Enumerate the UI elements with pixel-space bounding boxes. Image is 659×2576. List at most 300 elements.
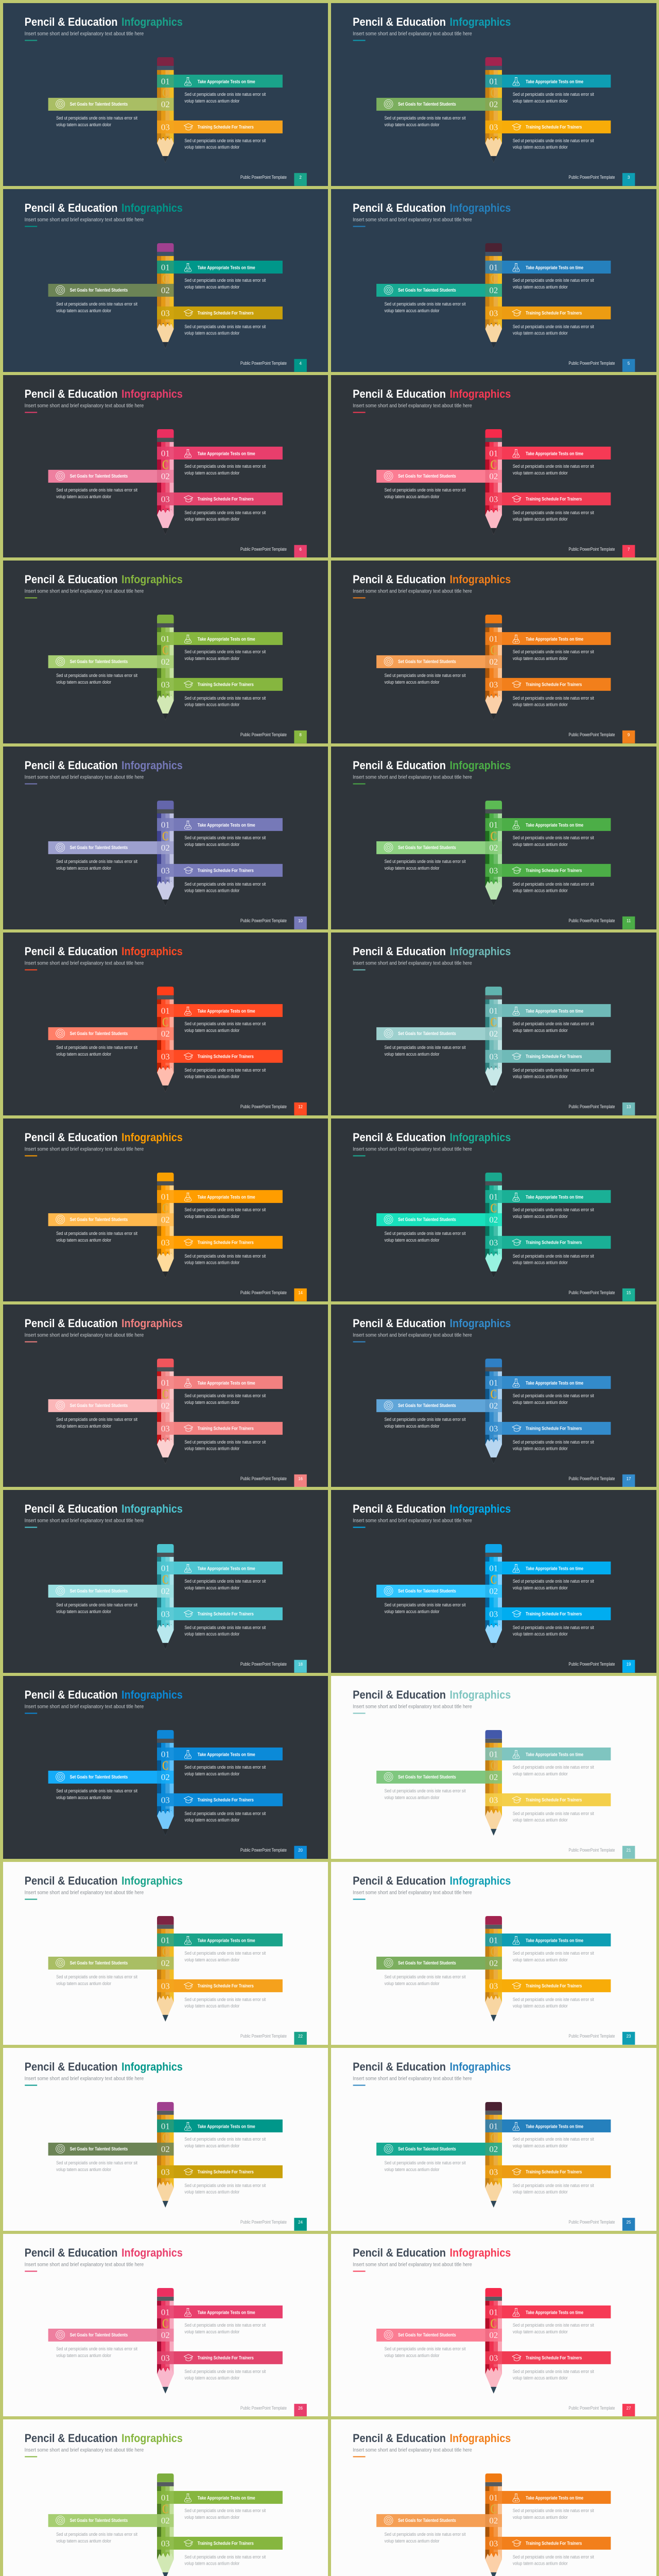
icon: pencil [485, 57, 502, 163]
footer: Public PowerPoint Template [568, 361, 615, 366]
bar 03: Training Schedule For Trainers [526, 2170, 582, 2175]
footer: Public PowerPoint Template [240, 547, 287, 552]
title: Infographics [122, 945, 183, 958]
text 03: volup tatem accus antium dolor [184, 888, 239, 893]
bar 03: 03 [161, 1238, 170, 1247]
text 03: volup tatem accus antium dolor [513, 1817, 568, 1823]
text 01 [184, 1393, 266, 1405]
subtitle: Insert some short and brief explanatory text about title here [25, 2076, 144, 2081]
bar 01 [485, 2120, 611, 2132]
watermark: C [162, 2502, 169, 2516]
text 01: volup tatem accus antium dolor [513, 1585, 568, 1590]
bar 03 [485, 1793, 611, 1806]
page number: 20 [298, 1848, 303, 1853]
text 01 [513, 1393, 594, 1405]
title [25, 573, 183, 586]
bar 03 [157, 492, 283, 505]
page number: 5 [628, 361, 630, 366]
panel: slide 7 [331, 375, 656, 557]
text 01: Sed ut perspiciatis unde onis iste natus error sit [184, 277, 266, 283]
text 01: Sed ut perspiciatis unde onis iste natus error sit [184, 1764, 266, 1770]
page number: 21 [627, 1848, 631, 1853]
footer: Public PowerPoint Template [240, 2219, 287, 2225]
bar 02: 02 [161, 1958, 170, 1968]
subtitle: Insert some short and brief explanatory text about title here [353, 1332, 472, 1338]
bar 03 [485, 864, 611, 877]
text 03 [513, 2182, 594, 2194]
title: Infographics [122, 1131, 183, 1144]
bar 01 [485, 447, 611, 459]
bar 01: 01 [161, 634, 170, 644]
text 03: Sed ut perspiciatis unde onis iste natus error sit [513, 1810, 594, 1816]
text 03 [184, 2368, 266, 2380]
panel: slide 21 [331, 1676, 656, 1859]
bar 03 [485, 2351, 611, 2364]
text 01: volup tatem accus antium dolor [184, 841, 239, 847]
icon: pencil [157, 2473, 174, 2576]
text 01 [184, 2508, 266, 2520]
text 01 [184, 649, 266, 661]
accent rule [353, 226, 366, 227]
title: Infographics [450, 2432, 511, 2445]
bar 03: 03 [489, 2167, 498, 2177]
bar 03: Training Schedule For Trainers [526, 311, 582, 316]
icon: pencil [157, 2288, 174, 2393]
bar 01: 01 [489, 1378, 498, 1387]
page number [622, 545, 635, 557]
icon: pencil [157, 987, 174, 1092]
title: Pencil & Education [25, 1131, 117, 1144]
accent rule [25, 1341, 37, 1342]
title: Pencil & Education [25, 202, 117, 214]
text 03: volup tatem accus antium dolor [513, 1260, 568, 1265]
icon: pencil [485, 429, 502, 534]
text 03: Sed ut perspiciatis unde onis iste natus error sit [184, 1253, 266, 1259]
title [25, 2247, 183, 2259]
text 02 [56, 487, 138, 499]
accent rule [353, 1713, 366, 1714]
text 01: volup tatem accus antium dolor [513, 98, 568, 104]
text 02: Sed ut perspiciatis unde onis iste natus error sit [56, 1044, 138, 1050]
text 02 [385, 115, 466, 127]
text 02: volup tatem accus antium dolor [385, 1609, 440, 1614]
icon: pencil [485, 2473, 502, 2576]
bar 02: Set Goals for Talented Students [70, 1774, 128, 1780]
text 03 [184, 2182, 266, 2194]
subtitle: Insert some short and brief explanatory text about title here [353, 2447, 472, 2453]
bar 01: Take Appropriate Tests on time [198, 451, 255, 456]
text 02 [385, 1044, 466, 1057]
text 02: volup tatem accus antium dolor [385, 494, 440, 499]
bar 01 [157, 1934, 283, 1946]
bar 01 [485, 2491, 611, 2504]
watermark: C [490, 829, 497, 843]
bar 03: 03 [489, 680, 498, 690]
bar 03: 03 [489, 122, 498, 132]
icon: pencil [485, 2102, 502, 2208]
icon: pencil [157, 1730, 174, 1836]
bar 03: Training Schedule For Trainers [198, 2541, 254, 2546]
subtitle: Insert some short and brief explanatory text about title here [25, 774, 144, 781]
text 03: Sed ut perspiciatis unde onis iste natus error sit [513, 2554, 594, 2560]
bar 02: Set Goals for Talented Students [70, 1031, 128, 1036]
text 03 [184, 696, 266, 707]
page number: 11 [627, 919, 631, 923]
bar 01: 01 [489, 1750, 498, 1759]
text 02 [56, 2346, 138, 2358]
bar 01: Take Appropriate Tests on time [526, 1566, 583, 1571]
text 03: volup tatem accus antium dolor [184, 1260, 239, 1265]
title: Pencil & Education [353, 202, 446, 214]
bar 02: Set Goals for Talented Students [70, 101, 128, 107]
bar 03 [485, 1421, 611, 1434]
text 01 [513, 649, 594, 661]
text 01: Sed ut perspiciatis unde onis iste natus error sit [513, 463, 594, 469]
accent rule [25, 1713, 37, 1714]
page number: 10 [298, 919, 303, 923]
footer: Public PowerPoint Template [568, 1848, 615, 1853]
text 01: volup tatem accus antium dolor [184, 470, 239, 476]
text 01: Sed ut perspiciatis unde onis iste natus error sit [513, 2322, 594, 2328]
text 01: Sed ut perspiciatis unde onis iste natus error sit [513, 1579, 594, 1584]
text 01 [513, 1579, 594, 1590]
bar 01: 01 [489, 1192, 498, 1201]
title [353, 573, 511, 586]
panel: slide 28 [3, 2419, 328, 2576]
bar 02 [48, 1399, 174, 1412]
text 01: volup tatem accus antium dolor [513, 1957, 568, 1962]
title [353, 1875, 511, 1887]
page number [622, 917, 635, 929]
text 03: Sed ut perspiciatis unde onis iste natus error sit [184, 2182, 266, 2188]
panel: slide 22 [3, 1862, 328, 2045]
text 02: volup tatem accus antium dolor [56, 2166, 111, 2172]
title: Pencil & Education [25, 1875, 117, 1887]
watermark: C [162, 643, 169, 657]
text 03: volup tatem accus antium dolor [184, 2003, 239, 2008]
text 03: Sed ut perspiciatis unde onis iste natus error sit [184, 1439, 266, 1445]
title [25, 388, 183, 400]
text 02 [56, 1230, 138, 1243]
bar 02: 02 [161, 2516, 170, 2526]
page number [622, 1846, 635, 1859]
text 02: volup tatem accus antium dolor [385, 2352, 440, 2358]
text 02 [385, 673, 466, 685]
text 02: volup tatem accus antium dolor [56, 1051, 111, 1057]
text 03 [184, 324, 266, 335]
bar 03: Training Schedule For Trainers [526, 682, 582, 687]
accent rule [25, 2084, 37, 2086]
footer: Public PowerPoint Template [568, 1290, 615, 1295]
text 03: Sed ut perspiciatis unde onis iste natus error sit [513, 1996, 594, 2002]
bar 02 [48, 1771, 174, 1784]
bar 02: Set Goals for Talented Students [70, 1403, 128, 1408]
text 03: Sed ut perspiciatis unde onis iste natus error sit [184, 1810, 266, 1816]
text 02: Sed ut perspiciatis unde onis iste natus error sit [385, 2532, 466, 2537]
bar 01: Take Appropriate Tests on time [198, 822, 255, 828]
watermark: C [490, 1387, 497, 1401]
text 02 [56, 1044, 138, 1057]
watermark: C [490, 1758, 497, 1773]
bar 02: 02 [489, 1215, 498, 1225]
text 02: Sed ut perspiciatis unde onis iste natus error sit [56, 673, 138, 678]
text 02: volup tatem accus antium dolor [385, 1980, 440, 1986]
title: Infographics [450, 202, 511, 214]
bar 03: 03 [161, 866, 170, 875]
text 01 [184, 1021, 266, 1033]
title: Pencil & Education [25, 945, 117, 958]
title: Infographics [122, 16, 183, 28]
bar 02: Set Goals for Talented Students [398, 845, 456, 850]
bar 03: 03 [161, 1981, 170, 1991]
text 03 [513, 881, 594, 893]
text 02 [56, 2160, 138, 2172]
bar 02 [48, 98, 174, 111]
text 01: volup tatem accus antium dolor [513, 2329, 568, 2334]
bar 02: 02 [161, 657, 170, 667]
icon: pencil [157, 1916, 174, 2022]
text 02: Sed ut perspiciatis unde onis iste natus error sit [385, 1044, 466, 1050]
bar 02: 02 [489, 1029, 498, 1039]
subtitle: Insert some short and brief explanatory text about title here [353, 403, 472, 409]
footer: Public PowerPoint Template [568, 1104, 615, 1109]
bar 01: 01 [161, 2121, 170, 2131]
watermark: C [162, 2130, 169, 2144]
icon: pencil [157, 615, 174, 720]
bar 02: Set Goals for Talented Students [70, 1589, 128, 1594]
panel: slide 29 [331, 2419, 656, 2576]
title [353, 1689, 511, 1701]
title: Pencil & Education [25, 388, 117, 400]
title: Infographics [122, 1875, 183, 1887]
subtitle: Insert some short and brief explanatory text about title here [353, 588, 472, 595]
text 03: Sed ut perspiciatis unde onis iste natus error sit [184, 2368, 266, 2374]
title: Pencil & Education [353, 1317, 446, 1330]
bar 03: 03 [489, 1423, 498, 1433]
footer: Public PowerPoint Template [240, 361, 287, 366]
bar 03 [157, 1236, 283, 1249]
title: Infographics [122, 2061, 183, 2073]
title: Pencil & Education [353, 574, 446, 586]
bar 01 [485, 261, 611, 274]
panel: slide 10 [3, 747, 328, 929]
text 03 [184, 2554, 266, 2566]
bar 02: 02 [161, 2144, 170, 2154]
bar 01 [485, 1376, 611, 1388]
bar 01 [485, 632, 611, 645]
footer: Public PowerPoint Template [240, 1104, 287, 1109]
icon: pencil [157, 1544, 174, 1650]
title [25, 1875, 183, 1887]
bar 03: 03 [161, 680, 170, 690]
bar 03 [485, 2537, 611, 2550]
bar 03: 03 [489, 866, 498, 875]
title: Pencil & Education [353, 2432, 446, 2445]
bar 01: Take Appropriate Tests on time [198, 2310, 255, 2315]
text 02: volup tatem accus antium dolor [56, 1794, 111, 1800]
text 01: Sed ut perspiciatis unde onis iste natus error sit [184, 2136, 266, 2142]
text 01: Sed ut perspiciatis unde onis iste natus error sit [513, 2508, 594, 2513]
text 02 [385, 1602, 466, 1614]
text 02: volup tatem accus antium dolor [385, 1051, 440, 1057]
bar 02: 02 [489, 843, 498, 853]
text 01: volup tatem accus antium dolor [184, 1957, 239, 1962]
bar 01: Take Appropriate Tests on time [198, 636, 255, 642]
title: Infographics [122, 388, 183, 400]
panel: slide 19 [331, 1490, 656, 1673]
accent rule [25, 1155, 37, 1156]
bar 01 [485, 1004, 611, 1017]
bar 03 [485, 678, 611, 691]
panel: slide 20 [3, 1676, 328, 1859]
text 01: volup tatem accus antium dolor [184, 1399, 239, 1405]
bar 03 [157, 2537, 283, 2550]
bar 01: 01 [489, 448, 498, 458]
text 03 [513, 1067, 594, 1079]
bar 01: Take Appropriate Tests on time [526, 2495, 583, 2501]
bar 03: Training Schedule For Trainers [198, 868, 254, 873]
bar 03 [485, 1236, 611, 1249]
text 01 [513, 1950, 594, 1962]
text 02: Sed ut perspiciatis unde onis iste natus error sit [385, 1602, 466, 1607]
bar 03: Training Schedule For Trainers [526, 2541, 582, 2546]
page number [294, 2403, 307, 2416]
bar 03: Training Schedule For Trainers [198, 1054, 254, 1059]
text 01: Sed ut perspiciatis unde onis iste natus error sit [184, 1950, 266, 1956]
bar 02: Set Goals for Talented Students [70, 2518, 128, 2523]
bar 03: 03 [489, 1981, 498, 1991]
text 03 [184, 1253, 266, 1265]
bar 02: Set Goals for Talented Students [70, 2146, 128, 2151]
bar 01 [157, 447, 283, 459]
watermark: C [490, 457, 497, 471]
text 03: Sed ut perspiciatis unde onis iste natus error sit [184, 324, 266, 329]
bar 03: 03 [161, 2167, 170, 2177]
bar 02 [48, 2143, 174, 2156]
bar 03: Training Schedule For Trainers [198, 682, 254, 687]
bar 02: Set Goals for Talented Students [70, 473, 128, 479]
bar 01 [157, 2120, 283, 2132]
text 03: Sed ut perspiciatis unde onis iste natus error sit [513, 2182, 594, 2188]
title [353, 16, 511, 28]
title: Infographics [450, 573, 511, 586]
bar 03: Training Schedule For Trainers [198, 2170, 254, 2175]
text 03 [184, 881, 266, 893]
text 02: Sed ut perspiciatis unde onis iste natus error sit [56, 301, 138, 307]
watermark: C [490, 1944, 497, 1959]
text 01 [513, 91, 594, 104]
page number: 14 [298, 1291, 303, 1295]
panel: slide 24 [3, 2048, 328, 2231]
text 02 [56, 858, 138, 871]
text 01: volup tatem accus antium dolor [184, 2515, 239, 2520]
text 03 [513, 1439, 594, 1451]
text 01: volup tatem accus antium dolor [184, 1585, 239, 1590]
bar 03 [157, 2165, 283, 2178]
title [353, 2247, 511, 2259]
text 01: volup tatem accus antium dolor [513, 841, 568, 847]
text 02: Sed ut perspiciatis unde onis iste natus error sit [385, 1788, 466, 1793]
panel: slide 3 [331, 3, 656, 186]
page number: 2 [299, 175, 302, 180]
text 03: Sed ut perspiciatis unde onis iste natus error sit [513, 138, 594, 143]
icon: pencil [485, 2288, 502, 2393]
bar 03: Training Schedule For Trainers [198, 311, 254, 316]
bar 01 [485, 1934, 611, 1946]
bar 03 [157, 1607, 283, 1620]
text 03: volup tatem accus antium dolor [184, 1445, 239, 1451]
bar 02: Set Goals for Talented Students [398, 101, 456, 107]
accent rule [25, 412, 37, 413]
bar 01: 01 [161, 1564, 170, 1573]
text 01 [184, 1579, 266, 1590]
watermark: C [162, 457, 169, 471]
text 02: Sed ut perspiciatis unde onis iste natus error sit [56, 1230, 138, 1236]
bar 02 [376, 1027, 502, 1040]
subtitle: Insert some short and brief explanatory text about title here [25, 403, 144, 409]
accent rule [25, 598, 37, 599]
bar 01: 01 [489, 2307, 498, 2317]
bar 02: 02 [489, 2144, 498, 2154]
title: Pencil & Education [353, 945, 446, 958]
accent rule [353, 2084, 366, 2086]
text 01: Sed ut perspiciatis unde onis iste natus error sit [513, 1393, 594, 1398]
text 02 [385, 2160, 466, 2172]
text 02: Sed ut perspiciatis unde onis iste natus error sit [385, 1230, 466, 1236]
title [25, 1131, 183, 1144]
text 02: volup tatem accus antium dolor [56, 308, 111, 313]
subtitle: Insert some short and brief explanatory text about title here [25, 217, 144, 223]
text 01: volup tatem accus antium dolor [184, 284, 239, 290]
bar 01: 01 [489, 820, 498, 830]
bar 02 [48, 1213, 174, 1226]
text 01 [513, 1021, 594, 1033]
text 02: Sed ut perspiciatis unde onis iste natus error sit [56, 858, 138, 864]
text 02: Sed ut perspiciatis unde onis iste natus error sit [56, 1416, 138, 1422]
text 03 [184, 1439, 266, 1451]
text 03 [184, 138, 266, 149]
text 01: volup tatem accus antium dolor [513, 1771, 568, 1776]
text 01: volup tatem accus antium dolor [184, 1771, 239, 1776]
bar 03: Training Schedule For Trainers [526, 125, 582, 130]
text 01 [184, 835, 266, 847]
page number: 6 [299, 547, 302, 551]
panel: slide 12 [3, 933, 328, 1115]
page number: 18 [298, 1662, 303, 1667]
bar 01 [485, 818, 611, 831]
bar 02 [48, 1957, 174, 1970]
title: Pencil & Education [353, 1689, 446, 1701]
icon: pencil [157, 801, 174, 906]
text 01 [184, 463, 266, 476]
bar 01 [485, 1190, 611, 1203]
bar 02: Set Goals for Talented Students [398, 2518, 456, 2523]
page number [294, 1103, 307, 1115]
title [25, 1317, 183, 1330]
watermark: C [490, 1201, 497, 1215]
bar 02 [376, 1771, 502, 1784]
title: Infographics [122, 573, 183, 586]
text 02 [385, 1416, 466, 1429]
accent rule [353, 2270, 366, 2272]
panel: slide 11 [331, 747, 656, 929]
text 02 [56, 1974, 138, 1986]
text 01: Sed ut perspiciatis unde onis iste natus error sit [513, 1764, 594, 1770]
text 03 [513, 696, 594, 707]
bar 01: Take Appropriate Tests on time [526, 1008, 583, 1014]
text 03 [513, 2368, 594, 2380]
bar 01: 01 [161, 1750, 170, 1759]
